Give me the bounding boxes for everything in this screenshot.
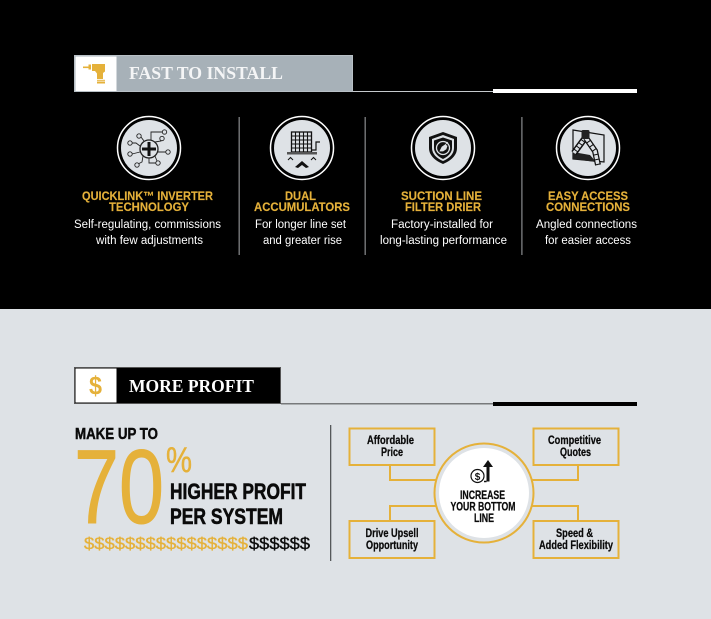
box: affordable price: Affordable — [367, 433, 414, 447]
divider lines — [238, 117, 522, 255]
icon: angled pipe connections — [556, 116, 620, 180]
center text: INCREASE — [460, 488, 505, 502]
icon: coil grid with arrows — [270, 116, 334, 180]
description — [380, 219, 507, 247]
box: speed and added flexibility: Speed & — [556, 526, 593, 540]
box: drive upsell opportunity: Drive Upsell — [366, 526, 418, 540]
description — [255, 219, 347, 247]
title: EASY ACCESS — [548, 189, 628, 203]
description — [74, 219, 221, 247]
description: For longer line set — [255, 219, 347, 231]
statement: PER SYSTEM — [170, 504, 283, 529]
title: SUCTION LINE — [401, 189, 482, 203]
dollar sign row: $$$$$$ — [249, 534, 311, 553]
title: ACCUMULATORS — [254, 200, 350, 214]
description: long-lasting performance — [380, 235, 507, 247]
title: FILTER DRIER — [405, 200, 481, 214]
description: for easier access — [545, 235, 631, 247]
box: affordable price: Price — [381, 445, 403, 459]
box: competitive quotes: Quotes — [560, 445, 591, 459]
section header: fast to install — [74, 56, 637, 93]
description: Angled connections — [536, 219, 637, 231]
icon: circuit with fan — [118, 116, 180, 180]
panel: profit statistic — [74, 426, 311, 553]
dollar sign row — [84, 534, 311, 553]
center text: LINE — [474, 511, 494, 525]
panel: quicklink inverter technology — [74, 116, 221, 247]
title — [401, 189, 482, 214]
description: Factory-installed for — [391, 219, 493, 231]
heading: fast to install: FAST TO INSTALL — [129, 63, 283, 83]
title — [82, 189, 213, 214]
lead text: MAKE UP TO — [75, 426, 158, 443]
statement — [170, 479, 306, 529]
description: with few adjustments — [95, 235, 203, 247]
title: CONNECTIONS — [546, 200, 630, 214]
box: affordable price — [350, 428, 434, 465]
diagram: increase your bottom line — [350, 428, 618, 558]
title: TECHNOLOGY — [109, 200, 189, 214]
panel: dual accumulators — [254, 116, 350, 247]
box: speed and added flexibility — [534, 521, 618, 558]
connectors — [390, 465, 578, 521]
statement: HIGHER PROFIT — [170, 479, 306, 504]
big number: 70 percent: % — [166, 441, 192, 480]
title — [254, 189, 350, 214]
center circle — [434, 444, 534, 542]
icon: drill — [83, 64, 105, 84]
box: competitive quotes: Competitive — [548, 433, 601, 447]
icon: shield with plug — [412, 116, 474, 180]
center text: YOUR BOTTOM — [450, 500, 516, 514]
box: speed and added flexibility: Added Flexibility — [539, 538, 613, 552]
box: competitive quotes — [534, 428, 618, 465]
panel: suction line filter drier — [380, 116, 507, 247]
panel: easy access connections — [536, 116, 637, 247]
description — [536, 219, 637, 247]
center text — [450, 488, 516, 525]
big number: 70 percent: 70 — [74, 429, 164, 546]
vertical divider — [330, 425, 331, 561]
title — [546, 189, 630, 214]
box: drive upsell opportunity: Opportunity — [366, 538, 418, 552]
description: and greater rise — [263, 235, 342, 247]
icon: dollar sign: $ — [89, 370, 102, 400]
dollar sign row: $$$$$$$$$$$$$$$$ — [84, 534, 249, 553]
icon: coin with up arrow: $ — [475, 472, 481, 483]
title: QUICKLINK™ INVERTER — [82, 189, 213, 203]
title: DUAL — [285, 189, 316, 203]
heading: more profit: MORE PROFIT — [129, 376, 254, 396]
box: drive upsell opportunity — [350, 521, 434, 558]
description: Self-regulating, commissions — [74, 219, 221, 231]
section header: more profit — [74, 368, 637, 406]
